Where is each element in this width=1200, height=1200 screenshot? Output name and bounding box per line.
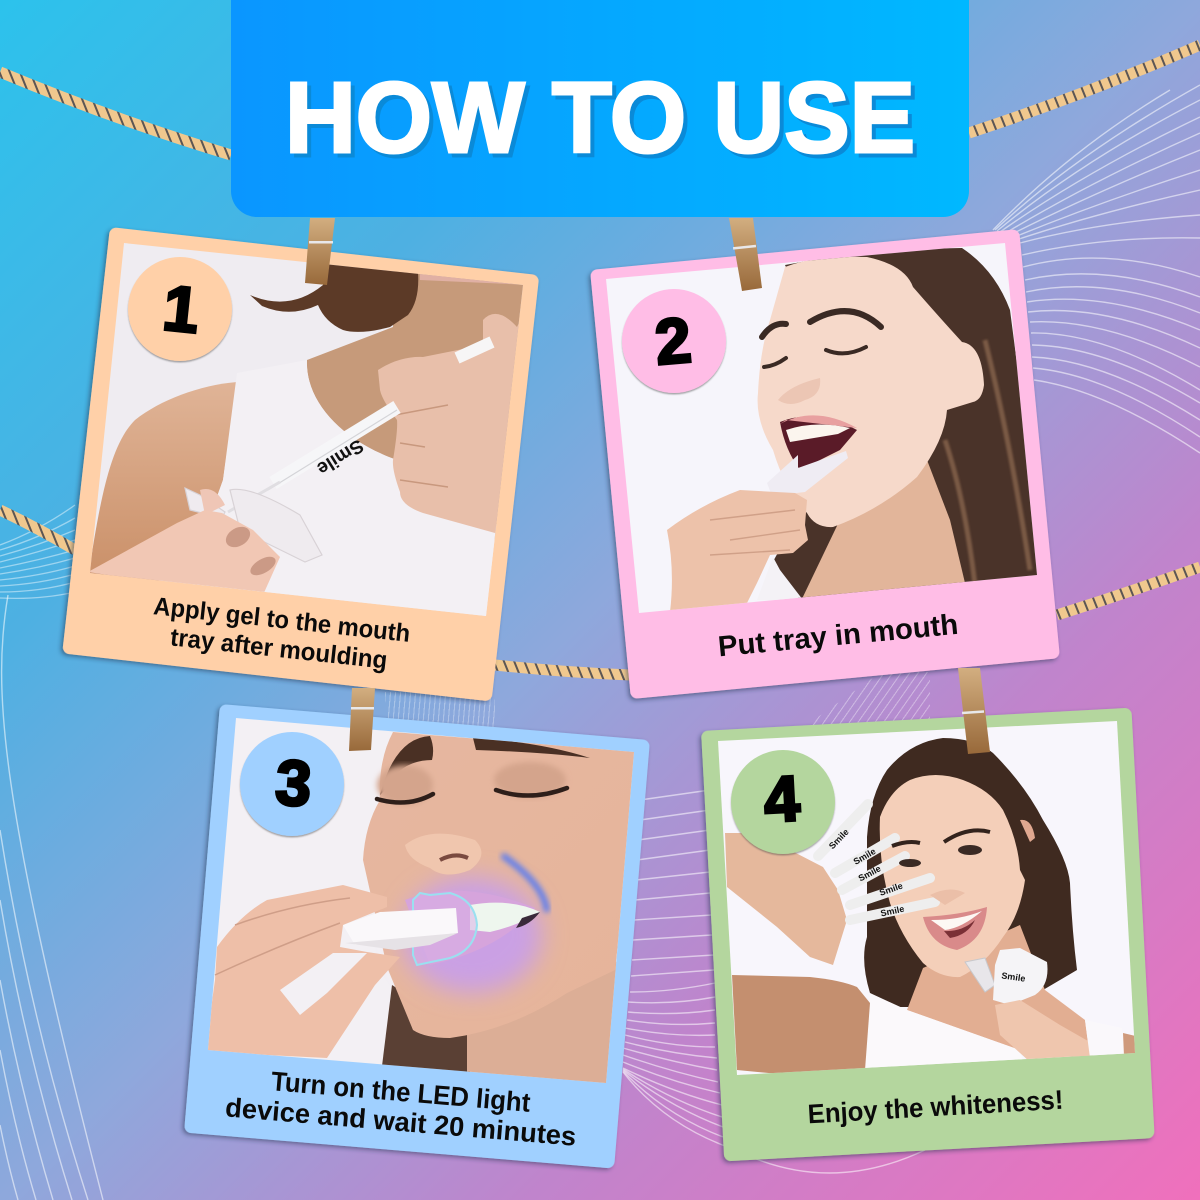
logos on pens: Smile [880, 904, 905, 918]
clothespin 1 [305, 218, 335, 285]
header banner [231, 0, 969, 217]
step number 2: 2 [652, 304, 694, 378]
logos on pens: Smile [857, 863, 883, 883]
logos on pens: Smile [852, 846, 877, 867]
step number 2 [622, 289, 726, 393]
photo: LED device [200, 710, 645, 1090]
photo: enjoying whiteness [710, 715, 1150, 1085]
panel: step 2 card [590, 229, 1060, 699]
caption 1: tray after moulding [169, 623, 389, 675]
step number 4 [731, 750, 835, 854]
clothespin 2 [729, 218, 762, 291]
step number 1 [128, 257, 232, 361]
logos on pens: Smile [878, 881, 904, 898]
caption 3: Turn on the LED light [270, 1066, 532, 1118]
panel: step 1 card [62, 227, 540, 701]
clothespin 3 [349, 688, 375, 751]
caption 1 [152, 592, 412, 675]
caption 2: Put tray in mouth [717, 609, 960, 663]
logo on syringe: Smile [313, 434, 367, 479]
logo on device: Smile [1001, 970, 1026, 984]
title: HOW TO USE [289, 66, 919, 178]
photo: applying gel to tray [90, 243, 523, 616]
title: HOW TO USE [285, 62, 915, 174]
step number 3 [240, 732, 344, 836]
step number 4: 4 [762, 762, 802, 836]
caption 3: device and wait 20 minutes [224, 1092, 577, 1152]
caption 4: Enjoy the whiteness! [807, 1085, 1064, 1129]
rope: clothesline [0, 45, 1200, 675]
caption 3 [224, 1066, 577, 1152]
photo: tray in mouth [600, 235, 1050, 625]
step number 1: 1 [160, 271, 203, 347]
clothespin 4 [958, 668, 990, 754]
logos on pens: Smile [827, 827, 851, 851]
panel: step 4 card [701, 708, 1155, 1161]
panel: step 3 card [184, 704, 650, 1169]
step number 3: 3 [273, 746, 314, 820]
logos on pens [827, 827, 905, 918]
caption 1: Apply gel to the mouth [152, 592, 412, 648]
